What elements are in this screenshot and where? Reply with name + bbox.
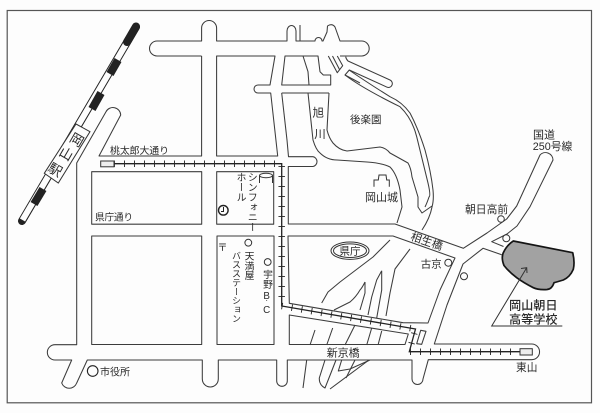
icon: Asahi Koko-mae stop (498, 216, 504, 222)
railway line (22, 26, 136, 221)
label: Korakuen: 後楽園 (350, 113, 382, 126)
label: Uno B.C: 宇野 (261, 269, 273, 289)
icon: post office: 〒 (218, 243, 228, 254)
label: Asahi Koko-mae: 朝日高前 (465, 202, 508, 216)
label: National Route 250 (533, 128, 573, 153)
label: Bus Station: バスステーション (231, 251, 241, 323)
label: Uno B.C: · (265, 296, 268, 305)
label: Asahi River: 旭 (313, 106, 324, 120)
icon: Uno BC stop (264, 259, 271, 265)
label: City Hall: 市役所 (100, 366, 130, 378)
icon: stop near school (503, 235, 510, 242)
station sign: Okayama Station: 山 (56, 144, 76, 164)
icon: Okayama Castle (374, 175, 389, 187)
label: Prefectural Office (331, 242, 369, 259)
label: Momotaro-odori: 桃太郎大通り (110, 144, 169, 157)
label: Symphony Hall (234, 172, 256, 232)
label: Symphony Hall: シンフォニー (245, 172, 256, 232)
station sign: Okayama Station: 駅 (45, 160, 65, 180)
label: Symphony Hall: ホール (234, 172, 246, 202)
tram line (114, 164, 520, 352)
station sign: Okayama Station: 岡 (67, 130, 86, 150)
label: Kencho-dori: 県庁通り (95, 212, 133, 224)
label: Prefectural Office: 県庁 (340, 246, 360, 258)
label: Asahi River: 川 (314, 128, 326, 141)
label: Higashiyama: 東山 (516, 361, 537, 374)
icon: hall tank (260, 173, 272, 183)
tram terminus: Higashiyama (520, 349, 532, 355)
label: Uno B.C: B (263, 291, 270, 302)
leader arrow to school (492, 268, 562, 326)
icon: Tenmaya stop (245, 239, 252, 246)
label: Okayama Asahi High School (509, 298, 558, 326)
rivers (303, 70, 433, 389)
icon: road stop (460, 273, 468, 280)
icon: city hall marker (87, 366, 98, 376)
label: Okayama Asahi High School: 岡山朝日 (509, 298, 558, 312)
icon: Kokyo stop (445, 259, 452, 266)
label: Uno B.C: C (263, 305, 270, 316)
label: Aioi Bridge: 相生橋 (409, 229, 445, 253)
tram terminus: Momotaro-dori (101, 161, 114, 167)
label: Uno B.C (261, 269, 273, 316)
label: National Route 250: 250号線 (533, 140, 573, 153)
school area (502, 241, 574, 290)
label: Asahi River (313, 106, 326, 141)
station sign: Okayama Station (44, 124, 90, 183)
road network (47, 21, 553, 388)
label: Shinkyo Bridge: 新京橋 (327, 346, 360, 360)
label: Okayama Castle: 岡山城 (365, 191, 398, 204)
label: Kokyo: 古京 (421, 258, 442, 270)
label: Okayama Asahi High School: 高等学校 (509, 312, 558, 326)
label: National Route 250: 国道 (533, 128, 555, 142)
icon: symphony hall marker (218, 206, 228, 215)
label: Tenmaya: 天満屋 (242, 251, 254, 280)
